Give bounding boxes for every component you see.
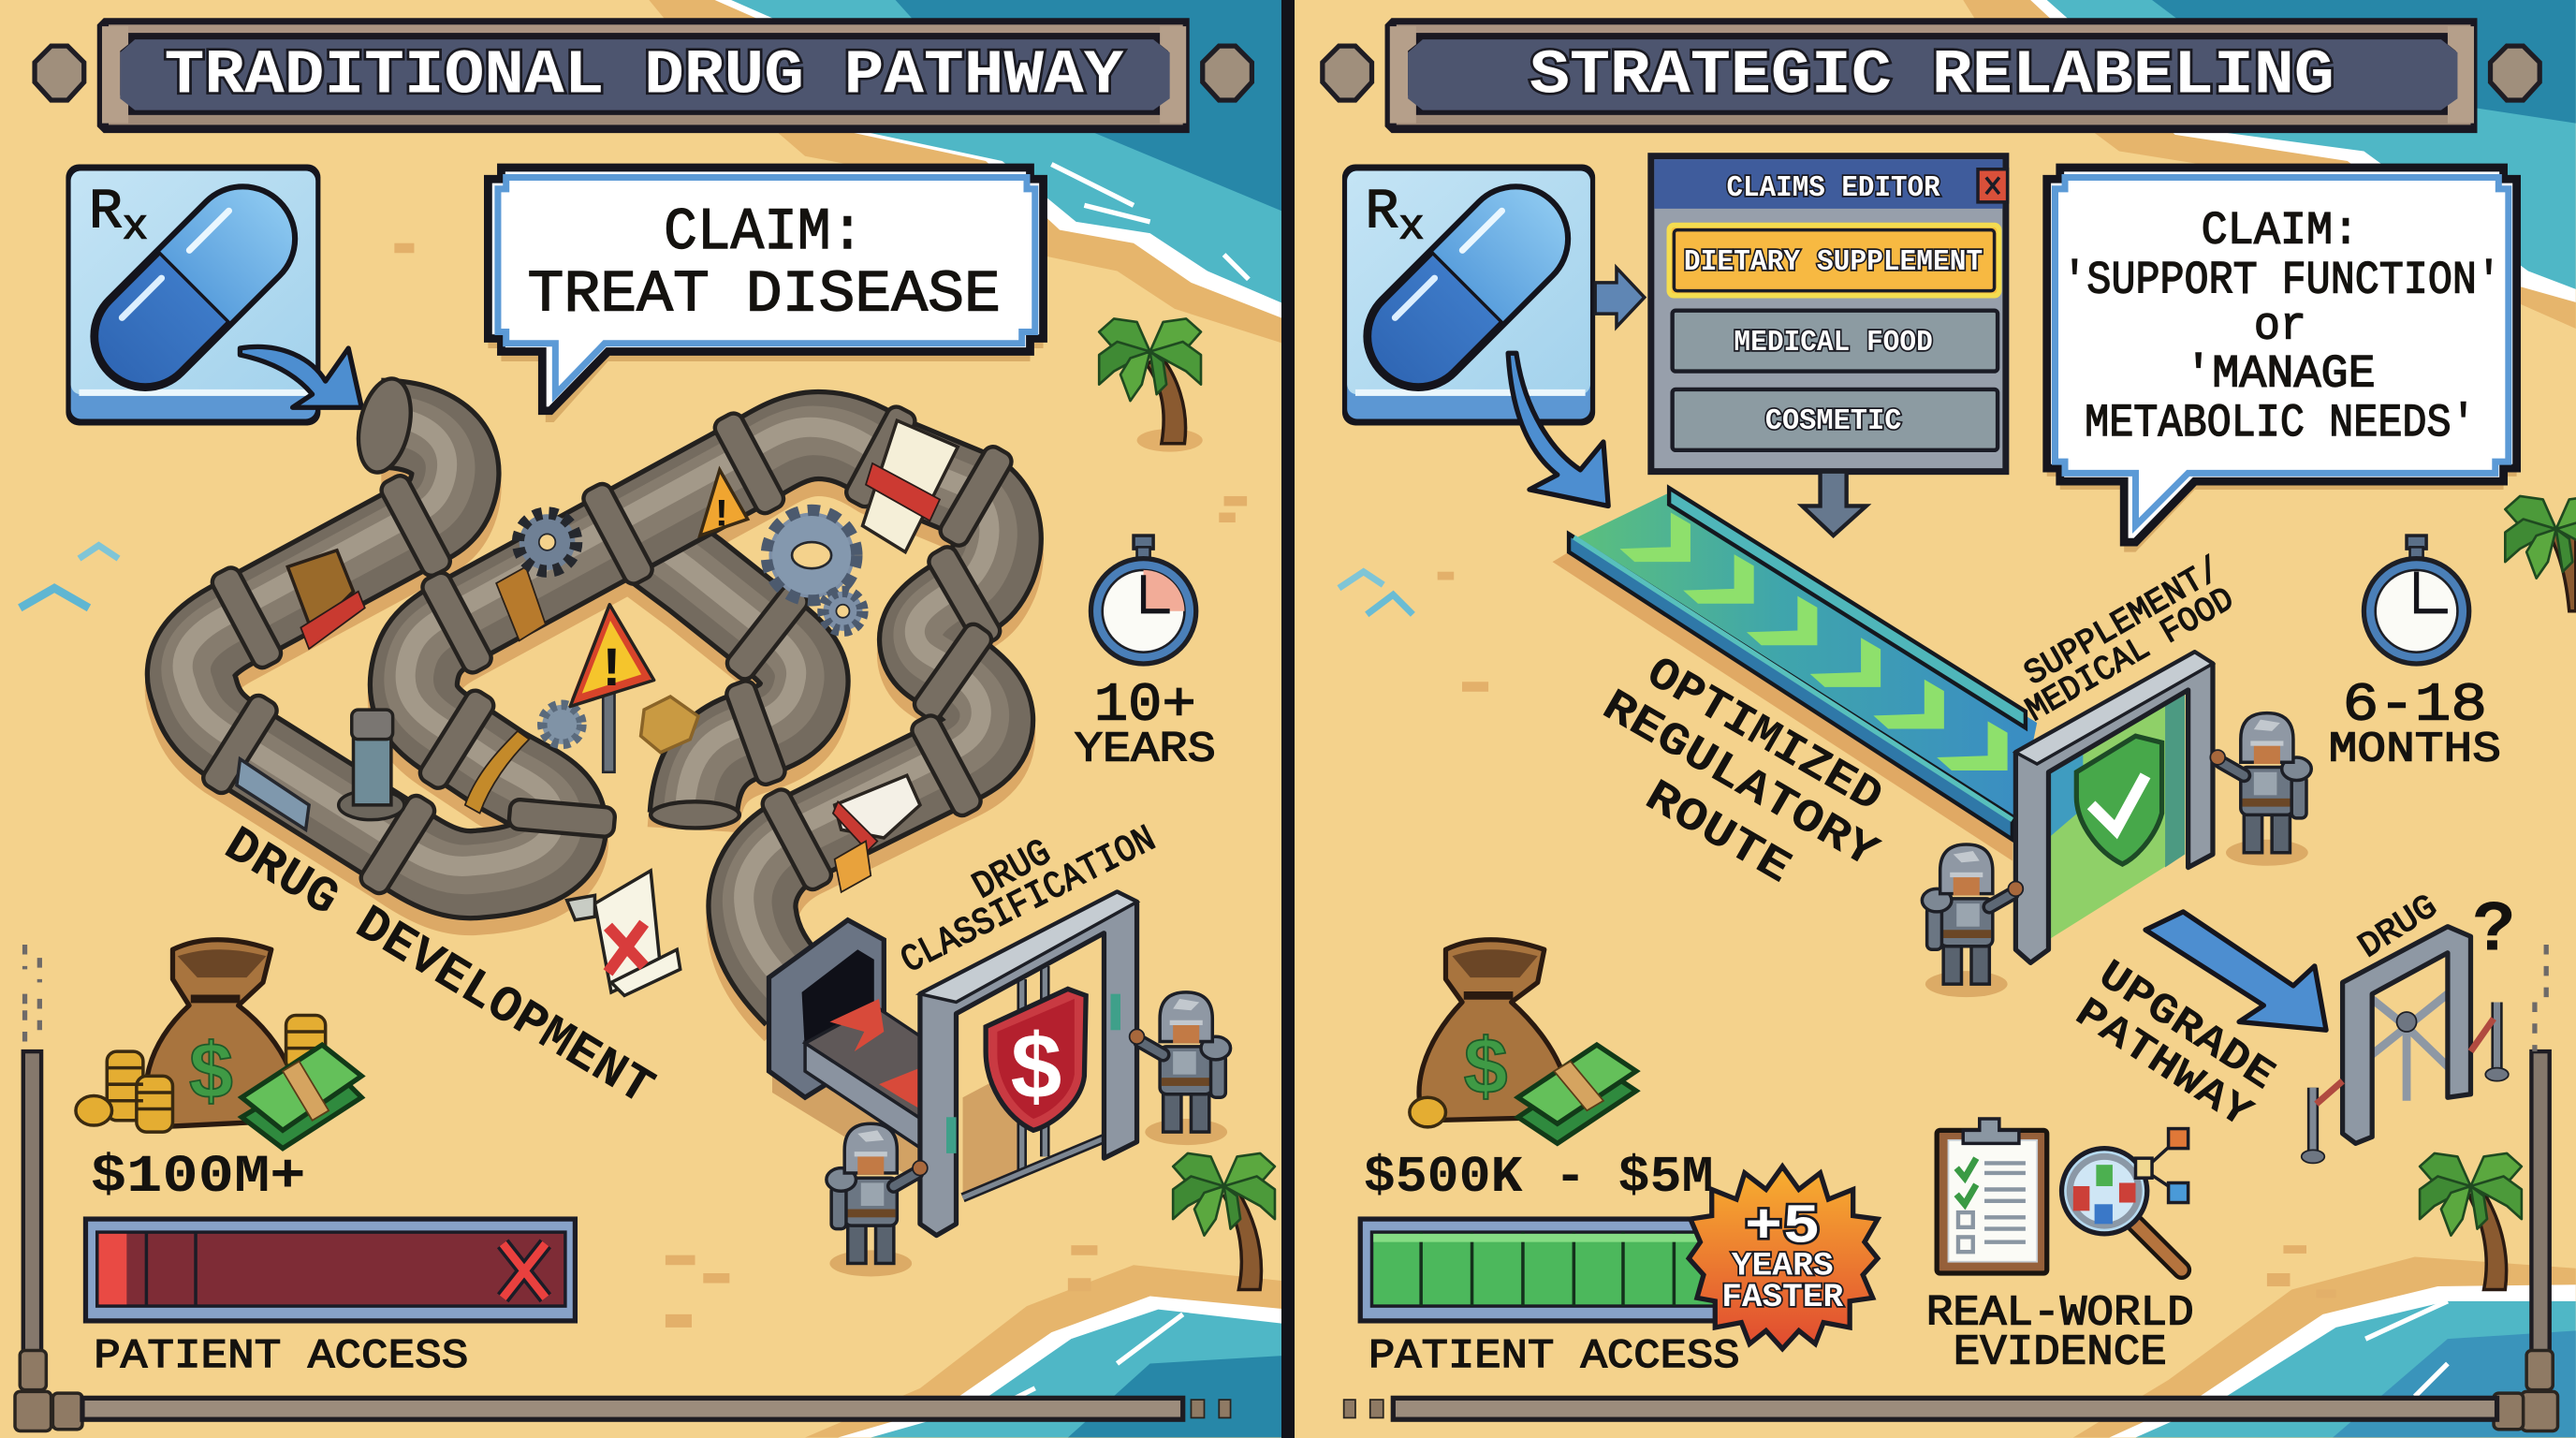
patient access bar: blocked — [85, 1219, 575, 1321]
tunnel and conveyor into gate — [768, 920, 923, 1182]
title text: TRADITIONAL DRUG PATHWAY — [165, 40, 1124, 111]
label: drug development: DRUG DEVELOPMENT — [213, 817, 663, 1119]
label: upgrade pathway: UPGRADE — [2089, 951, 2284, 1101]
metal plate — [237, 759, 309, 829]
orange tag — [835, 841, 871, 892]
title banner: strategic relabeling — [1323, 18, 2539, 133]
warning exclamation: ! — [710, 493, 734, 538]
guard: front gate — [827, 1123, 928, 1277]
clipboard checklist — [1937, 1119, 2047, 1273]
title text: STRATEGIC RELABELING — [1530, 40, 2334, 111]
claim text line 2: TREAT DISEASE — [528, 261, 1001, 329]
stat: 6-18 months: MONTHS — [2329, 725, 2501, 773]
gate: green supplement gate — [2015, 653, 2213, 962]
gear: lower broken — [542, 705, 581, 744]
label: upgrade pathway — [2066, 951, 2284, 1139]
shield: red dollar — [986, 989, 1086, 1130]
palm: lower left panel — [1173, 1153, 1275, 1290]
claim text: CLAIM: — [664, 198, 864, 266]
small waves: left panel — [20, 546, 119, 608]
Rx label: R — [89, 180, 123, 243]
label: real-world evidence: EVIDENCE — [1954, 1328, 2167, 1377]
arrow: upgrade pathway — [2145, 912, 2326, 1030]
stat: 6-18 months: 6-18 — [2343, 676, 2487, 737]
stat: 10+ years: YEARS — [1075, 725, 1216, 773]
ocean: right panel top right — [1963, 0, 2576, 329]
ocean: right panel bottom right — [2073, 1256, 2576, 1437]
ocean: left panel top right — [649, 0, 1288, 345]
palm: upper left panel — [1099, 318, 1203, 452]
red clip — [833, 801, 877, 851]
money bag: traditional — [146, 940, 296, 1127]
arrow: capsule into pipeline — [240, 346, 361, 407]
label: drug classification: CLASSIFICATION — [895, 818, 1163, 983]
money bag: traditional: $ — [187, 1033, 235, 1122]
cash bundle — [1518, 1045, 1636, 1143]
card: Rx capsule right — [1342, 164, 1595, 426]
claim lines — [2062, 205, 2501, 449]
badge: +5 years faster: YEARS — [1732, 1248, 1834, 1285]
label: supplement / medical food: MEDICAL FOOD — [2020, 580, 2241, 731]
shield: green check — [2076, 736, 2162, 864]
label: drug gate: DRUG — [2352, 888, 2445, 967]
close button — [1978, 169, 2008, 202]
stopwatch: 10+ years — [1090, 536, 1196, 664]
option: medical food — [1673, 311, 1998, 372]
scroll on pipe — [862, 420, 958, 552]
guard: rear green gate — [2210, 713, 2311, 866]
Rx label: x — [123, 202, 148, 251]
turnstile gate — [2302, 927, 2509, 1163]
claim lines: or — [2254, 300, 2306, 352]
coin — [1410, 1097, 1445, 1127]
label: real-world evidence — [1926, 1288, 2194, 1377]
warning sign: ! — [594, 638, 628, 702]
speech bubble: relabeled claim — [2047, 168, 2517, 552]
capsule — [1346, 167, 1588, 408]
ramp: optimized regulatory route — [1553, 488, 2037, 861]
option: cosmetic: COSMETIC — [1765, 405, 1901, 438]
badge: +5 years faster: FASTER — [1721, 1279, 1844, 1316]
stat: 10+ years: 10+ — [1094, 676, 1196, 737]
option: cosmetic — [1673, 389, 1998, 450]
gate: drug classification — [920, 892, 1137, 1236]
gear: small right — [823, 592, 862, 631]
magnifier with data nodes — [2062, 1129, 2188, 1269]
label: upgrade pathway: PATHWAY — [2066, 989, 2261, 1139]
palm: lower right panel — [2420, 1153, 2522, 1290]
ocean: left panel bottom right — [805, 1265, 1288, 1437]
red tape — [866, 463, 940, 521]
label: optimized regulatory route — [1593, 647, 1891, 895]
patient access bar: green — [1360, 1219, 1730, 1321]
claim lines: METABOLIC NEEDS' — [2085, 397, 2476, 449]
label: patient access: PATIENT ACCESS — [94, 1333, 468, 1380]
Rx label: R — [1365, 180, 1398, 243]
label: optimized regulatory route: ROUTE — [1636, 770, 1800, 895]
shield: red dollar: $ — [1009, 1020, 1064, 1125]
guard: rear gate — [1130, 992, 1231, 1145]
gear: small upper — [520, 514, 575, 570]
palm: upper right panel — [2505, 496, 2576, 611]
window title: CLAIMS EDITOR — [1727, 172, 1940, 205]
claim lines: CLAIM: — [2202, 205, 2359, 257]
stopwatch: 6-18 months — [2364, 536, 2469, 664]
small waves: right panel — [1339, 572, 1412, 614]
money bag: relabeling: $ — [1462, 1028, 1510, 1117]
gear: large — [768, 513, 855, 598]
vertical gauge pipe — [339, 710, 404, 820]
label: optimized regulatory route: REGULATORY — [1593, 680, 1887, 880]
label: real-world evidence: REAL-WORLD — [1926, 1288, 2194, 1337]
label: supplement / medical food: SUPPLEMENT/ — [2018, 550, 2229, 695]
claim lines: 'MANAGE — [2185, 347, 2376, 400]
rust band lower — [465, 731, 529, 814]
warning triangle on pipe — [700, 470, 748, 536]
arrow: capsule to ramp — [1508, 353, 1608, 506]
option: dietary supplement — [1669, 225, 1999, 296]
rust band — [496, 566, 546, 640]
arrow: capsule to claims editor — [1595, 268, 1645, 327]
money bag: relabeling — [1419, 940, 1568, 1121]
arrow: editor down to ramp — [1802, 472, 1866, 536]
badge: +5 years faster: +5 — [1745, 1196, 1821, 1259]
claim lines: 'SUPPORT FUNCTION' — [2062, 254, 2501, 306]
stat: 6-18 months — [2329, 676, 2501, 773]
label: drug classification: DRUG — [966, 831, 1059, 909]
option: dietary supplement: DIETARY SUPPLEMENT — [1684, 246, 1983, 279]
stat: 10+ years — [1075, 676, 1216, 773]
label: optimized regulatory route: OPTIMIZED — [1637, 647, 1891, 824]
warning sign — [570, 605, 654, 772]
rubble — [641, 697, 698, 753]
frame pipe: right panel — [1344, 945, 2557, 1431]
frame pipe: left panel — [15, 945, 1231, 1431]
sand specks and shoreline marks — [394, 243, 2336, 1328]
question mark: ? — [2472, 890, 2516, 972]
capsule — [73, 167, 315, 408]
rust patch — [287, 550, 354, 633]
panel divider — [1281, 0, 1295, 1438]
red tape on pipe — [300, 592, 365, 649]
Rx label: x — [1398, 202, 1425, 251]
card: Rx capsule left — [66, 164, 320, 426]
stat: $100M+: $100M+ — [91, 1147, 306, 1207]
speech bubble: claim treat disease — [488, 168, 1044, 422]
badge: +5 years faster — [1689, 1167, 1878, 1349]
scroll: rejected — [567, 871, 681, 995]
title banner: traditional drug pathway — [35, 18, 1251, 133]
claims editor window — [1651, 156, 2008, 472]
cash bundle — [242, 1045, 361, 1149]
pipeline: drug development — [183, 374, 1015, 1008]
stat: $500K-$5M: $500K - $5M — [1364, 1150, 1714, 1207]
label: patient access: PATIENT ACCESS — [1368, 1333, 1740, 1380]
guard: front green gate — [1922, 844, 2023, 997]
coin stacks — [76, 1015, 326, 1132]
paper pile — [835, 775, 920, 838]
option: medical food: MEDICAL FOOD — [1734, 327, 1933, 360]
